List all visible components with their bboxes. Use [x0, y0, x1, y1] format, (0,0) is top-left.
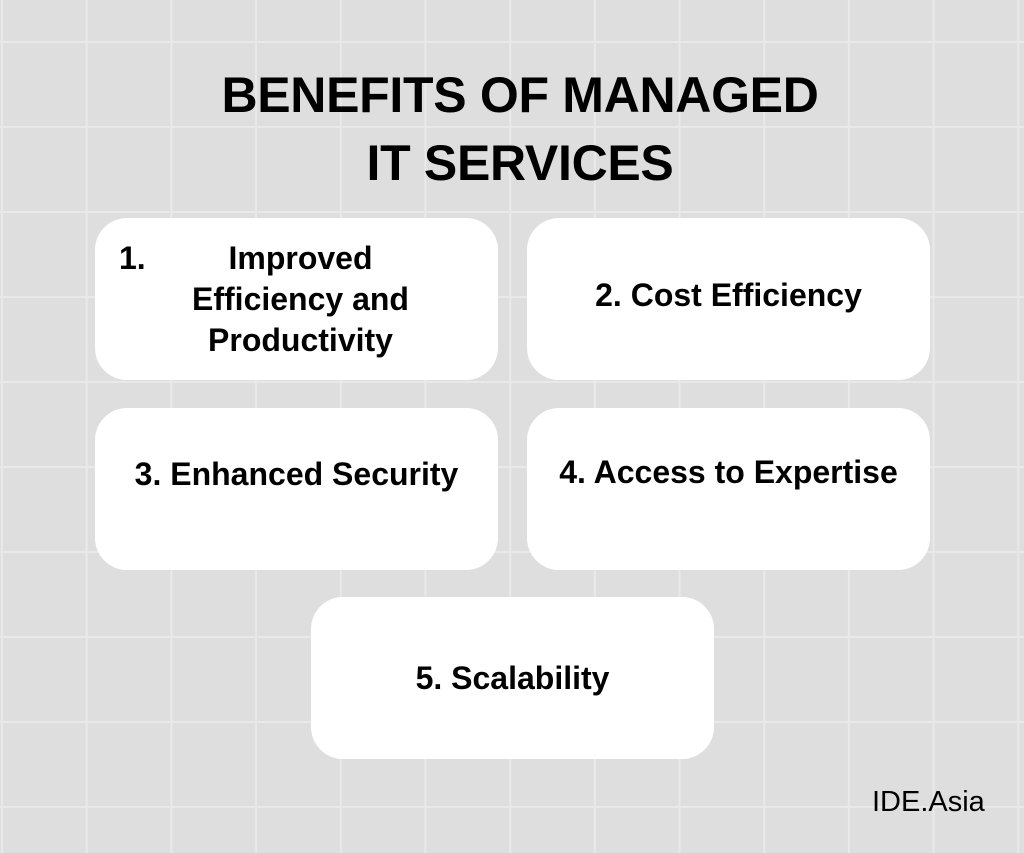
box 1: Improved: [228, 240, 372, 276]
box 1: Efficiency and: [192, 280, 409, 316]
title: [221, 67, 819, 191]
box 1: Productivity: [208, 322, 393, 358]
box 1: [95, 218, 498, 380]
box 2: 2. Cost Efficiency: [595, 276, 862, 312]
title: IT SERVICES: [366, 135, 673, 191]
box 3: [95, 408, 498, 570]
box 1: 1.: [119, 240, 146, 276]
title: BENEFITS OF MANAGED: [221, 67, 819, 123]
box 4: 4. Access to Expertise: [559, 454, 898, 490]
box 5: 5. Scalability: [416, 660, 609, 696]
box 4: [527, 408, 930, 570]
box 3: 3. Enhanced Security: [135, 456, 458, 492]
box 5: [311, 597, 714, 759]
brand: IDE.Asia: [872, 786, 985, 818]
box 2: [527, 218, 930, 380]
